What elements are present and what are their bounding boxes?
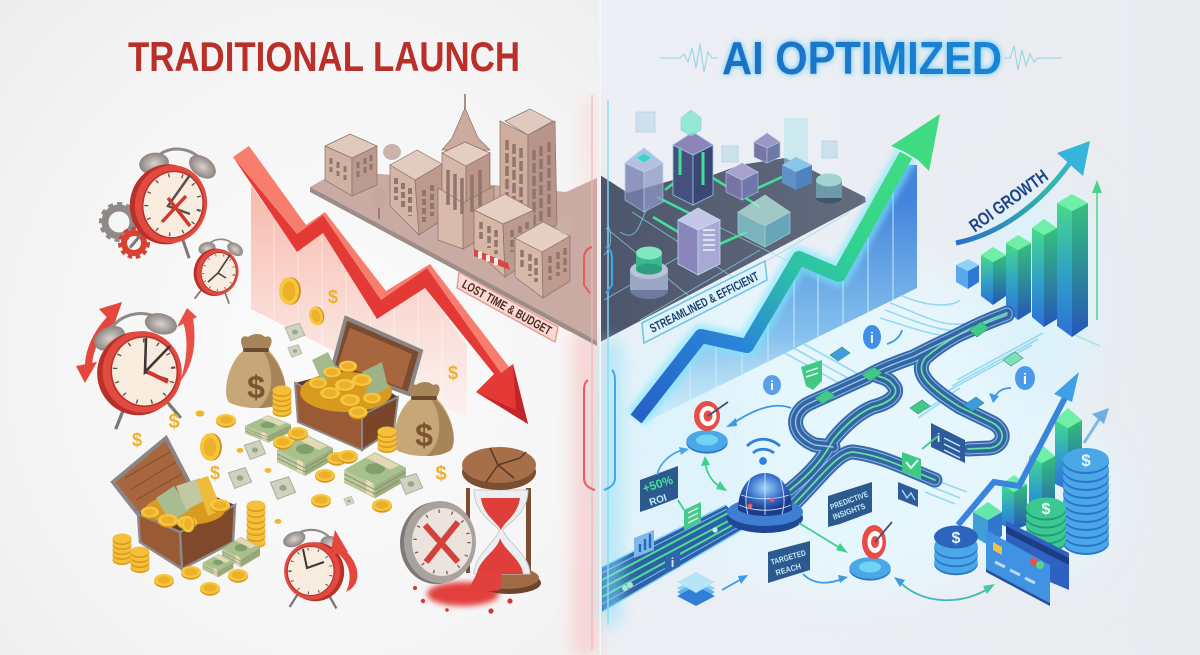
label: lost time and budget bbox=[457, 272, 558, 342]
green circuit lines bbox=[653, 170, 797, 247]
note cards and small charts bbox=[634, 360, 965, 606]
central divider lines and brackets bbox=[584, 0, 622, 655]
cracked top bbox=[462, 454, 536, 490]
rising green arrow bbox=[636, 114, 940, 419]
clock tower bbox=[438, 94, 494, 249]
coin stacks bbox=[112, 386, 396, 573]
scattered coins, bills and dollar signs: $ bbox=[168, 411, 180, 433]
callout: +50% ROI: +50% bbox=[641, 473, 675, 496]
city block on platform bbox=[310, 94, 597, 346]
money bag 2 bbox=[394, 382, 454, 456]
road light rim bbox=[790, 313, 1007, 503]
callout: targeted reach: TARGETED bbox=[770, 548, 807, 567]
building 5 bbox=[474, 194, 534, 277]
alarm clock 4 with arrow bbox=[280, 528, 358, 608]
target icon 1 bbox=[686, 401, 728, 454]
winding roads bbox=[790, 313, 1007, 503]
hourglass bbox=[462, 447, 541, 594]
thin upward arrow bbox=[1075, 180, 1102, 346]
gold coins in chest bbox=[300, 352, 392, 419]
ROI growth swoosh arrow bbox=[956, 141, 1090, 243]
callout: predictive insights: INSIGHTS bbox=[832, 501, 867, 522]
coins and cash in chest bbox=[141, 476, 230, 532]
callout: +50% ROI bbox=[640, 466, 678, 512]
hub: globe dome with wi-fi bbox=[727, 439, 803, 533]
tower 4 and 5 bbox=[726, 133, 780, 200]
scattered coins, bills and dollar signs: $ bbox=[210, 463, 220, 483]
building 1 bbox=[325, 134, 377, 196]
falling coins and dollar signs: $ bbox=[328, 287, 338, 307]
red divider brackets bbox=[584, 247, 595, 490]
callout: predictive insights bbox=[828, 482, 872, 527]
pink declining bars bbox=[251, 185, 467, 419]
treasure chest 2 bbox=[113, 438, 235, 569]
fading data streams bbox=[783, 295, 1043, 504]
road surface bbox=[790, 313, 1007, 503]
road green center lines bbox=[790, 313, 1007, 503]
layered data cards bbox=[677, 572, 715, 606]
lower right rising arrow bbox=[958, 372, 1079, 525]
money bag 2: $ bbox=[415, 417, 433, 453]
building 6 bbox=[515, 222, 570, 298]
stack of blue coins: $ bbox=[1081, 451, 1091, 470]
callout: targeted reach bbox=[768, 541, 810, 583]
arrowheads bbox=[679, 393, 999, 594]
note cards and small charts: i bbox=[671, 555, 674, 570]
label: streamlined and efficient bbox=[642, 261, 767, 343]
callout: predictive insights: PREDICTIVE bbox=[829, 489, 870, 512]
small blue coin stack bbox=[934, 526, 978, 575]
main road to hub bbox=[602, 505, 745, 612]
tower 1 bbox=[625, 148, 663, 212]
wi-fi icon bbox=[747, 439, 780, 464]
background: right panel bbox=[600, 0, 1200, 655]
shop awning bbox=[474, 249, 510, 270]
3D ROI bar chart bbox=[956, 194, 1088, 337]
label: ROI growth: ROI GROWTH bbox=[965, 166, 1052, 236]
red falling arrow bbox=[233, 146, 528, 424]
info icons: i bbox=[770, 378, 774, 393]
falling coins and dollar signs: $ bbox=[448, 363, 458, 383]
stack of blue coins bbox=[1063, 448, 1109, 555]
tower 2 bbox=[673, 110, 713, 205]
stack of green coins: $ bbox=[1042, 501, 1051, 518]
blue bars under rising arrow bbox=[640, 165, 917, 425]
floating panels bbox=[636, 112, 837, 162]
building 2 bbox=[390, 150, 442, 235]
title glow: AI OPTIMIZED bbox=[722, 32, 1002, 84]
glass box bbox=[738, 195, 790, 247]
dark platform bbox=[600, 158, 866, 342]
road markers bbox=[815, 322, 1023, 414]
money bag 1 bbox=[226, 334, 286, 408]
red rotation arrow left bbox=[76, 302, 122, 383]
target icon 2 bbox=[849, 522, 892, 581]
treasure chest 1 bbox=[295, 318, 421, 450]
waveforms beside AI title bbox=[660, 44, 1062, 72]
tree bbox=[372, 144, 401, 219]
label: lost time and budget: LOST TIME & BUDGET bbox=[460, 277, 554, 338]
scattered coins, bills and dollar signs bbox=[132, 410, 447, 596]
label: streamlined and efficient: STREAMLINED & EFFICIENT bbox=[647, 269, 761, 336]
platform bbox=[310, 170, 597, 341]
cash stacks bbox=[203, 415, 406, 577]
background: left panel bbox=[0, 0, 600, 655]
alarm clock 3 with rotate arrows bbox=[76, 302, 197, 431]
callout: +50% ROI: ROI bbox=[648, 493, 669, 509]
title: AI optimized: AI OPTIMIZED bbox=[722, 32, 1002, 84]
central divider pink glow bbox=[572, 100, 600, 655]
info icons: i bbox=[1023, 371, 1027, 388]
road outer edge bbox=[790, 313, 1007, 503]
scattered coins, bills and dollar signs: $ bbox=[132, 430, 142, 450]
alarm clock 1 with gears bbox=[101, 138, 223, 263]
falling coins and dollar signs bbox=[279, 277, 458, 383]
AI platform with data centers bbox=[600, 110, 866, 342]
info icons: i bbox=[870, 330, 874, 347]
broken clock with red X bbox=[400, 501, 476, 584]
alarm clock 2 small bbox=[188, 234, 247, 306]
tower 6 with beam bbox=[782, 118, 812, 190]
base bbox=[477, 572, 541, 594]
tall building bbox=[500, 109, 557, 240]
red rotation arrow bbox=[336, 547, 358, 592]
gears bbox=[101, 204, 148, 257]
red sand spill bbox=[413, 582, 513, 614]
lower right growth bars bbox=[973, 408, 1082, 545]
data cylinders bbox=[630, 174, 842, 299]
callout: targeted reach: REACH bbox=[775, 562, 802, 578]
scattered coins, bills and dollar signs: $ bbox=[435, 463, 447, 485]
title: traditional launch: TRADITIONAL LAUNCH bbox=[128, 33, 520, 80]
blue divider brackets bbox=[604, 247, 615, 490]
right panel glow bbox=[600, 190, 1120, 600]
credit cards bbox=[986, 521, 1069, 606]
info icons bbox=[763, 325, 1035, 395]
red rotation arrow right bbox=[177, 308, 197, 382]
small blue coin stack: $ bbox=[952, 530, 961, 547]
stack of green coins bbox=[1026, 498, 1066, 552]
tower 3 bbox=[678, 208, 720, 275]
small pale up arrow bbox=[1084, 408, 1109, 443]
money bag 1: $ bbox=[247, 369, 265, 405]
note cards and small charts: i bbox=[937, 431, 940, 445]
connector arrows bbox=[657, 330, 1011, 600]
